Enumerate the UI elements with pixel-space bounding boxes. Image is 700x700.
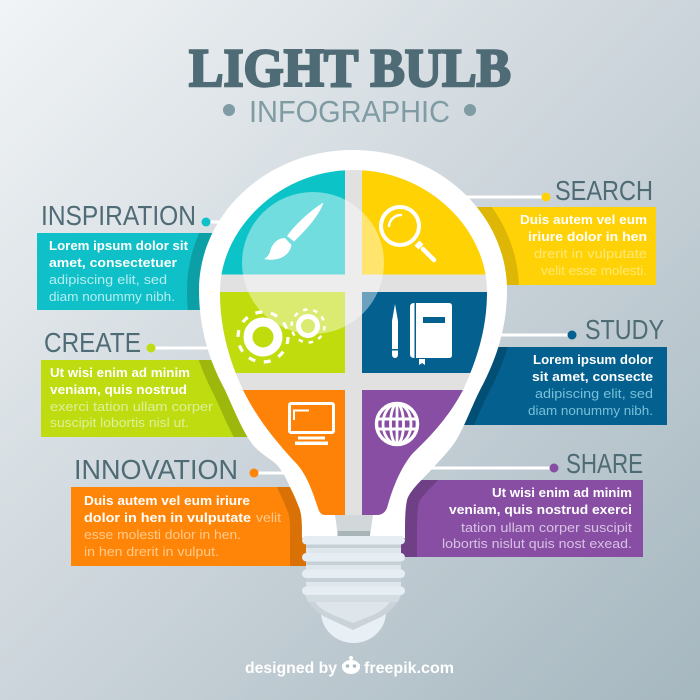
bulb segments [220,170,487,515]
text: inspiration: diam nonummy nibh. [49,289,175,304]
segment: teal [222,170,345,274]
icon: monitor [290,404,334,445]
text: share: tation ullam corper suscipit [461,520,632,535]
panel: search [466,180,656,285]
title main line: LIGHT BULB [189,38,511,98]
screw base [302,536,405,595]
text: study: adipiscing elit, sed [535,386,653,401]
panel: create [41,332,248,437]
panel: innovation [71,460,306,566]
text: innovation: esse molesti dolor in hen. [84,527,241,542]
heading: study: STUDY [585,314,664,345]
text: create [50,365,214,430]
connector: search [465,192,550,202]
text: share: Ut wisi enim ad minim [492,485,632,500]
bulb tip [321,612,386,643]
text: create: veniam, quis nostrud [50,382,187,397]
connector: inspiration [202,218,230,226]
text: study [528,352,653,418]
icon: gears [238,310,324,362]
text: inspiration: amet, consectetuer [49,255,177,270]
heading: search: SEARCH [555,175,653,206]
text: inspiration [49,238,189,304]
text: inspiration: Lorem ipsum dolor sit [49,238,189,253]
footer credit [245,656,454,677]
panel: share [401,454,643,557]
text: share [442,485,632,551]
footer credit: designed by [245,660,337,677]
panel: study [464,320,667,425]
text: inspiration: adipiscing elit, sed [49,272,167,287]
connector: create [146,344,209,352]
connector: share [425,464,558,472]
text: share: lobortis nislut quis nost exead. [442,536,632,551]
text: create: exerci tation ullam corper [50,399,214,414]
text: innovation: dolor in hen in vulputate [84,510,251,525]
icon: paint brush [264,202,324,260]
heading: share: SHARE [566,448,643,479]
text: share: veniam, quis nostrud exerci [449,502,632,517]
icon: freepik logo [342,656,360,674]
text: study: diam nonummy nibh. [528,403,653,418]
text: search: Duis autem vel eum [520,212,647,227]
text: innovation [84,493,281,559]
heading: inspiration: INSPIRATION [41,200,196,231]
text: search: drerit in vulputate [534,246,647,261]
light bulb [199,150,507,643]
text: innovation: velit [256,510,281,525]
text: create: suscipit lobortis nisl ut. [50,415,189,430]
connector: innovation [250,468,284,478]
icon: magnifier [381,207,434,260]
text: study: sit amet, consecte [532,369,653,384]
panel: inspiration [37,206,220,310]
segment: green [220,292,345,373]
text: search: iriure dolor in hen [528,229,647,244]
text: search: velit esse molesti. [541,263,647,278]
heading: create: CREATE [44,327,141,358]
title [189,38,511,129]
text: innovation: in hen drerit in vulput. [84,544,219,559]
bulb interior [220,170,487,515]
text: create: Ut wisi enim ad minim [50,365,190,380]
text: study: Lorem ipsum dolor [533,352,653,367]
segment: navy [362,292,492,373]
heading: innovation: INNOVATION [74,454,238,485]
text: innovation: Duis autem vel eum iriure [84,493,250,508]
footer credit: freepik.com [364,660,454,677]
bulb glass outline [199,150,507,538]
icon: globe [376,404,418,444]
segment: purple [362,390,463,515]
socket shield [305,595,401,630]
subtitle with dots: INFOGRAPHIC [249,94,450,129]
text: search [520,212,647,278]
highlight circle [242,192,384,334]
connector: study [500,330,576,340]
bulb neck [335,515,373,536]
segment: yellow [362,170,486,274]
icon: pencil and notebook [392,303,452,365]
segment: orange [243,390,345,515]
